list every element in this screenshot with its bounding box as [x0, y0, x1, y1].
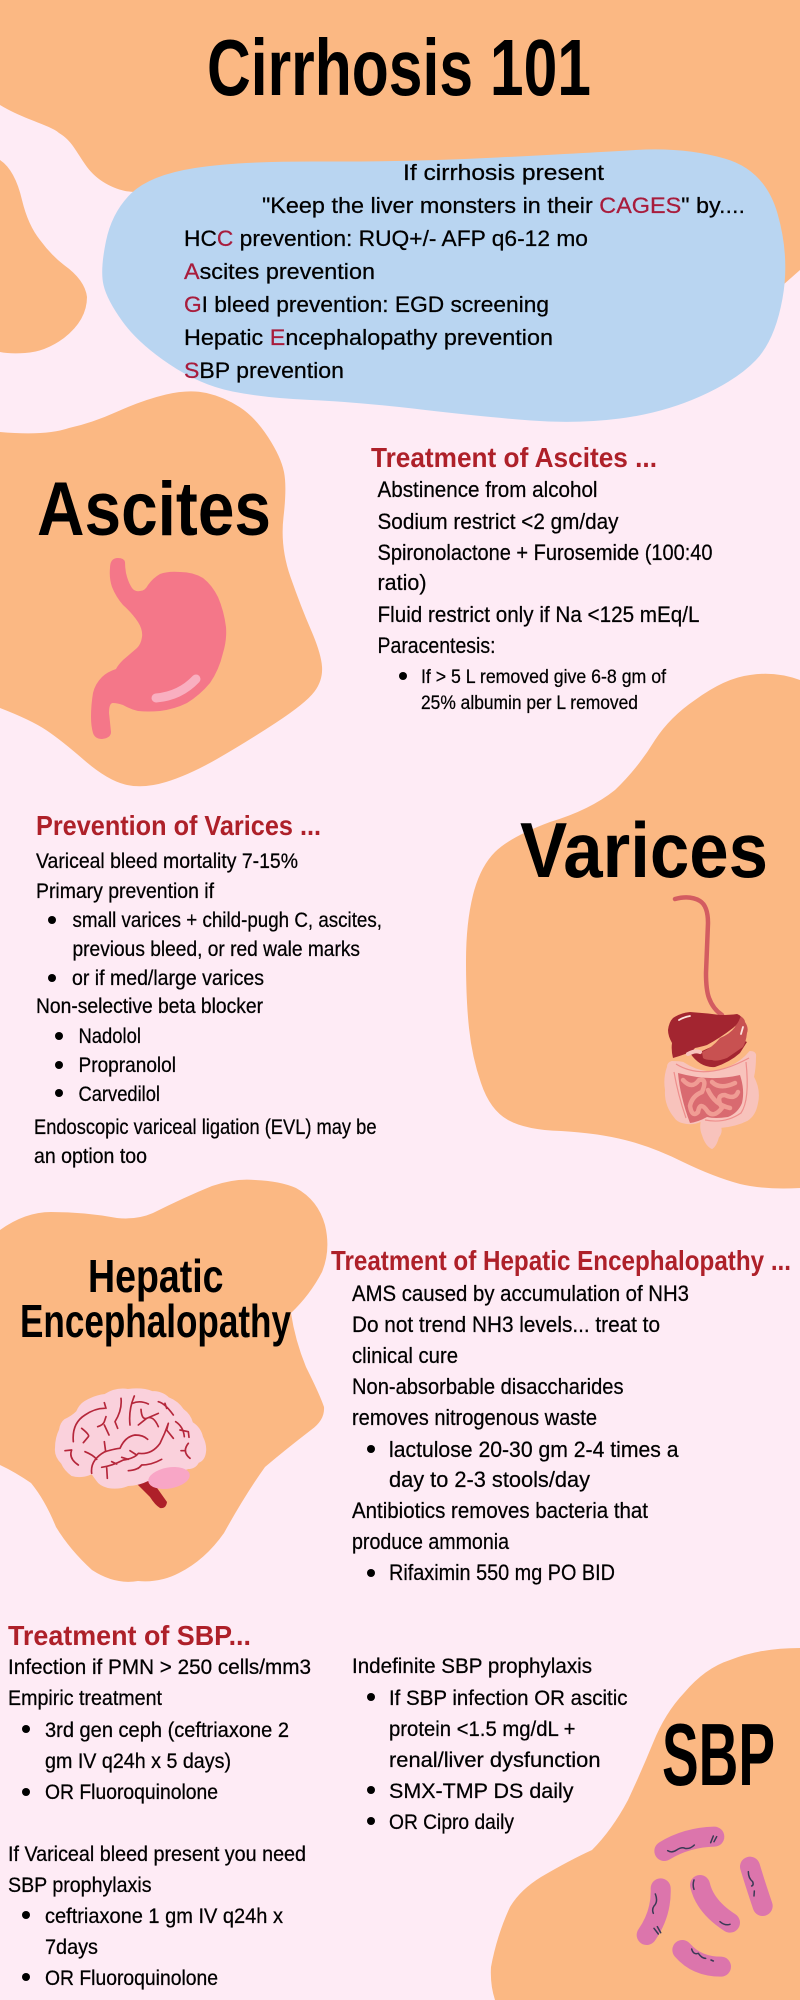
heading: Varices: Varices: [520, 806, 768, 894]
panel: treatment of SBP: 7days: [45, 1936, 98, 1959]
panel: treatment of ascites: Fluid restrict only if Na <125 mEq/L: [378, 602, 700, 627]
panel: treatment of hepatic encephalopathy: lactulose 20-30 gm 2-4 times a: [389, 1437, 679, 1462]
panel: treatment of SBP: OR Fluoroquinolone: [45, 1781, 218, 1804]
panel: treatment of ascites: Abstinence from alcohol: [378, 477, 598, 502]
icon: stomach: [91, 558, 226, 739]
panel: indefinite SBP prophylaxis: OR Cipro daily: [389, 1811, 514, 1834]
panel: treatment of SBP: Empiric treatment: [8, 1687, 162, 1710]
panel: treatment of SBP: If Variceal bleed present you need: [8, 1843, 306, 1866]
panel: prevention of varices: Non-selective beta blocker: [36, 995, 263, 1018]
text block: CAGES mnemonic: Ascites prevention: [184, 259, 375, 284]
panel: treatment of hepatic encephalopathy: AMS caused by accumulation of NH3: [352, 1281, 689, 1306]
icon: bacteria: [647, 1836, 763, 1967]
panel: treatment of hepatic encephalopathy: [331, 1245, 791, 1585]
panel: prevention of varices: Carvedilol: [78, 1083, 160, 1106]
panel: indefinite SBP prophylaxis: renal/liver dysfunction: [389, 1749, 600, 1772]
panel: treatment of ascites: If > 5 L removed give 6-8 gm of: [421, 667, 667, 688]
blob: left orange: [0, 160, 87, 353]
heading: Hepatic Encephalopathy: Encephalopathy: [20, 1295, 291, 1347]
blob: blue CAGES panel: [102, 149, 785, 422]
panel: prevention of varices: small varices + child-pugh C, ascites,: [72, 909, 382, 932]
blob: SBP orange: [491, 1648, 800, 2000]
panel: indefinite SBP prophylaxis: Indefinite SBP prophylaxis: [352, 1655, 592, 1678]
panel: indefinite SBP prophylaxis: protein <1.5 mg/dL +: [389, 1718, 576, 1741]
panel: treatment of hepatic encephalopathy: Rifaximin 550 mg PO BID: [389, 1560, 615, 1585]
panel: treatment of ascites: Sodium restrict <2 gm/day: [378, 509, 619, 534]
panel: treatment of SBP: OR Fluoroquinolone: [45, 1967, 218, 1990]
panel: treatment of ascites: 25% albumin per L removed: [421, 693, 638, 714]
blob: hepatic encephalopathy orange: [0, 1180, 327, 1582]
panel: treatment of ascites: [371, 442, 712, 714]
blob: ascites orange: [0, 391, 322, 786]
title: Cirrhosis 101: [207, 23, 591, 112]
panel: prevention of varices: Variceal bleed mortality 7-15%: [36, 850, 298, 873]
panel: treatment of hepatic encephalopathy: Non-absorbable disaccharides: [352, 1374, 624, 1399]
text block: CAGES mnemonic: Hepatic Encephalopathy prevention: [184, 325, 553, 350]
panel: treatment of SBP: ceftriaxone 1 gm IV q24h x: [45, 1905, 283, 1928]
panel: indefinite SBP prophylaxis: [352, 1655, 628, 1834]
panel: prevention of varices: previous bleed, or red wale marks: [72, 938, 360, 961]
panel: treatment of ascites: Paracentesis:: [378, 633, 496, 658]
panel: prevention of varices: Endoscopic variceal ligation (EVL) may be: [34, 1116, 376, 1139]
panel: treatment of hepatic encephalopathy: clinical cure: [352, 1343, 458, 1368]
text block: CAGES mnemonic: SBP prevention: [184, 358, 344, 383]
text block: CAGES mnemonic: HCC prevention: RUQ+/- AFP q6-12 mo: [184, 226, 588, 251]
panel: treatment of hepatic encephalopathy: Do not trend NH3 levels... treat to: [352, 1312, 660, 1337]
heading: Ascites: Ascites: [37, 467, 271, 552]
panel: prevention of varices: [34, 810, 382, 1168]
heading: Hepatic Encephalopathy: [20, 1250, 291, 1347]
panel: treatment of SBP: gm IV q24h x 5 days): [45, 1750, 231, 1773]
panel: prevention of varices: an option too: [34, 1145, 147, 1168]
panel: indefinite SBP prophylaxis: If SBP infection OR ascitic: [389, 1687, 628, 1710]
panel: prevention of varices: Nadolol: [78, 1025, 141, 1048]
text block: CAGES mnemonic: If cirrhosis present: [403, 160, 605, 185]
panel: treatment of SBP: SBP prophylaxis: [8, 1874, 152, 1897]
text block: CAGES mnemonic: GI bleed prevention: EGD screening: [184, 292, 549, 317]
panel: prevention of varices: or if med/large varices: [72, 967, 264, 990]
icon: digestive system: [665, 897, 758, 1148]
blob: varices orange: [466, 674, 800, 1188]
panel: treatment of hepatic encephalopathy: removes nitrogenous waste: [352, 1405, 597, 1430]
panel: treatment of SBP: Infection if PMN > 250 cells/mm3: [8, 1656, 311, 1679]
panel: treatment of ascites: ratio): [378, 570, 426, 595]
panel: prevention of varices: Propranolol: [78, 1054, 176, 1077]
panel: treatment of hepatic encephalopathy: produce ammonia: [352, 1529, 509, 1554]
text block: CAGES mnemonic: "Keep the liver monsters in their CAGES" by....: [262, 193, 745, 218]
text block: CAGES mnemonic: [184, 160, 745, 383]
heading: treatment of ascites: Treatment of Ascites ...: [371, 442, 657, 473]
panel: indefinite SBP prophylaxis: SMX-TMP DS daily: [389, 1780, 574, 1803]
panel: treatment of hepatic encephalopathy: Antibiotics removes bacteria that: [352, 1498, 649, 1523]
blob: top orange header: [0, 0, 800, 285]
panel: treatment of SBP: 3rd gen ceph (ceftriaxone 2: [45, 1719, 289, 1742]
heading: prevention of varices: Prevention of Varices ...: [36, 810, 321, 841]
panel: treatment of SBP: [8, 1620, 311, 1990]
panel: prevention of varices: Primary prevention if: [36, 880, 214, 903]
panel: treatment of hepatic encephalopathy: day to 2-3 stools/day: [389, 1467, 591, 1492]
panel: treatment of ascites: Spironolactone + Furosemide (100:40: [378, 540, 712, 565]
icon: brain: [56, 1389, 205, 1508]
heading: Hepatic Encephalopathy: Hepatic: [88, 1250, 224, 1302]
heading: treatment of SBP: Treatment of SBP...: [8, 1620, 251, 1651]
